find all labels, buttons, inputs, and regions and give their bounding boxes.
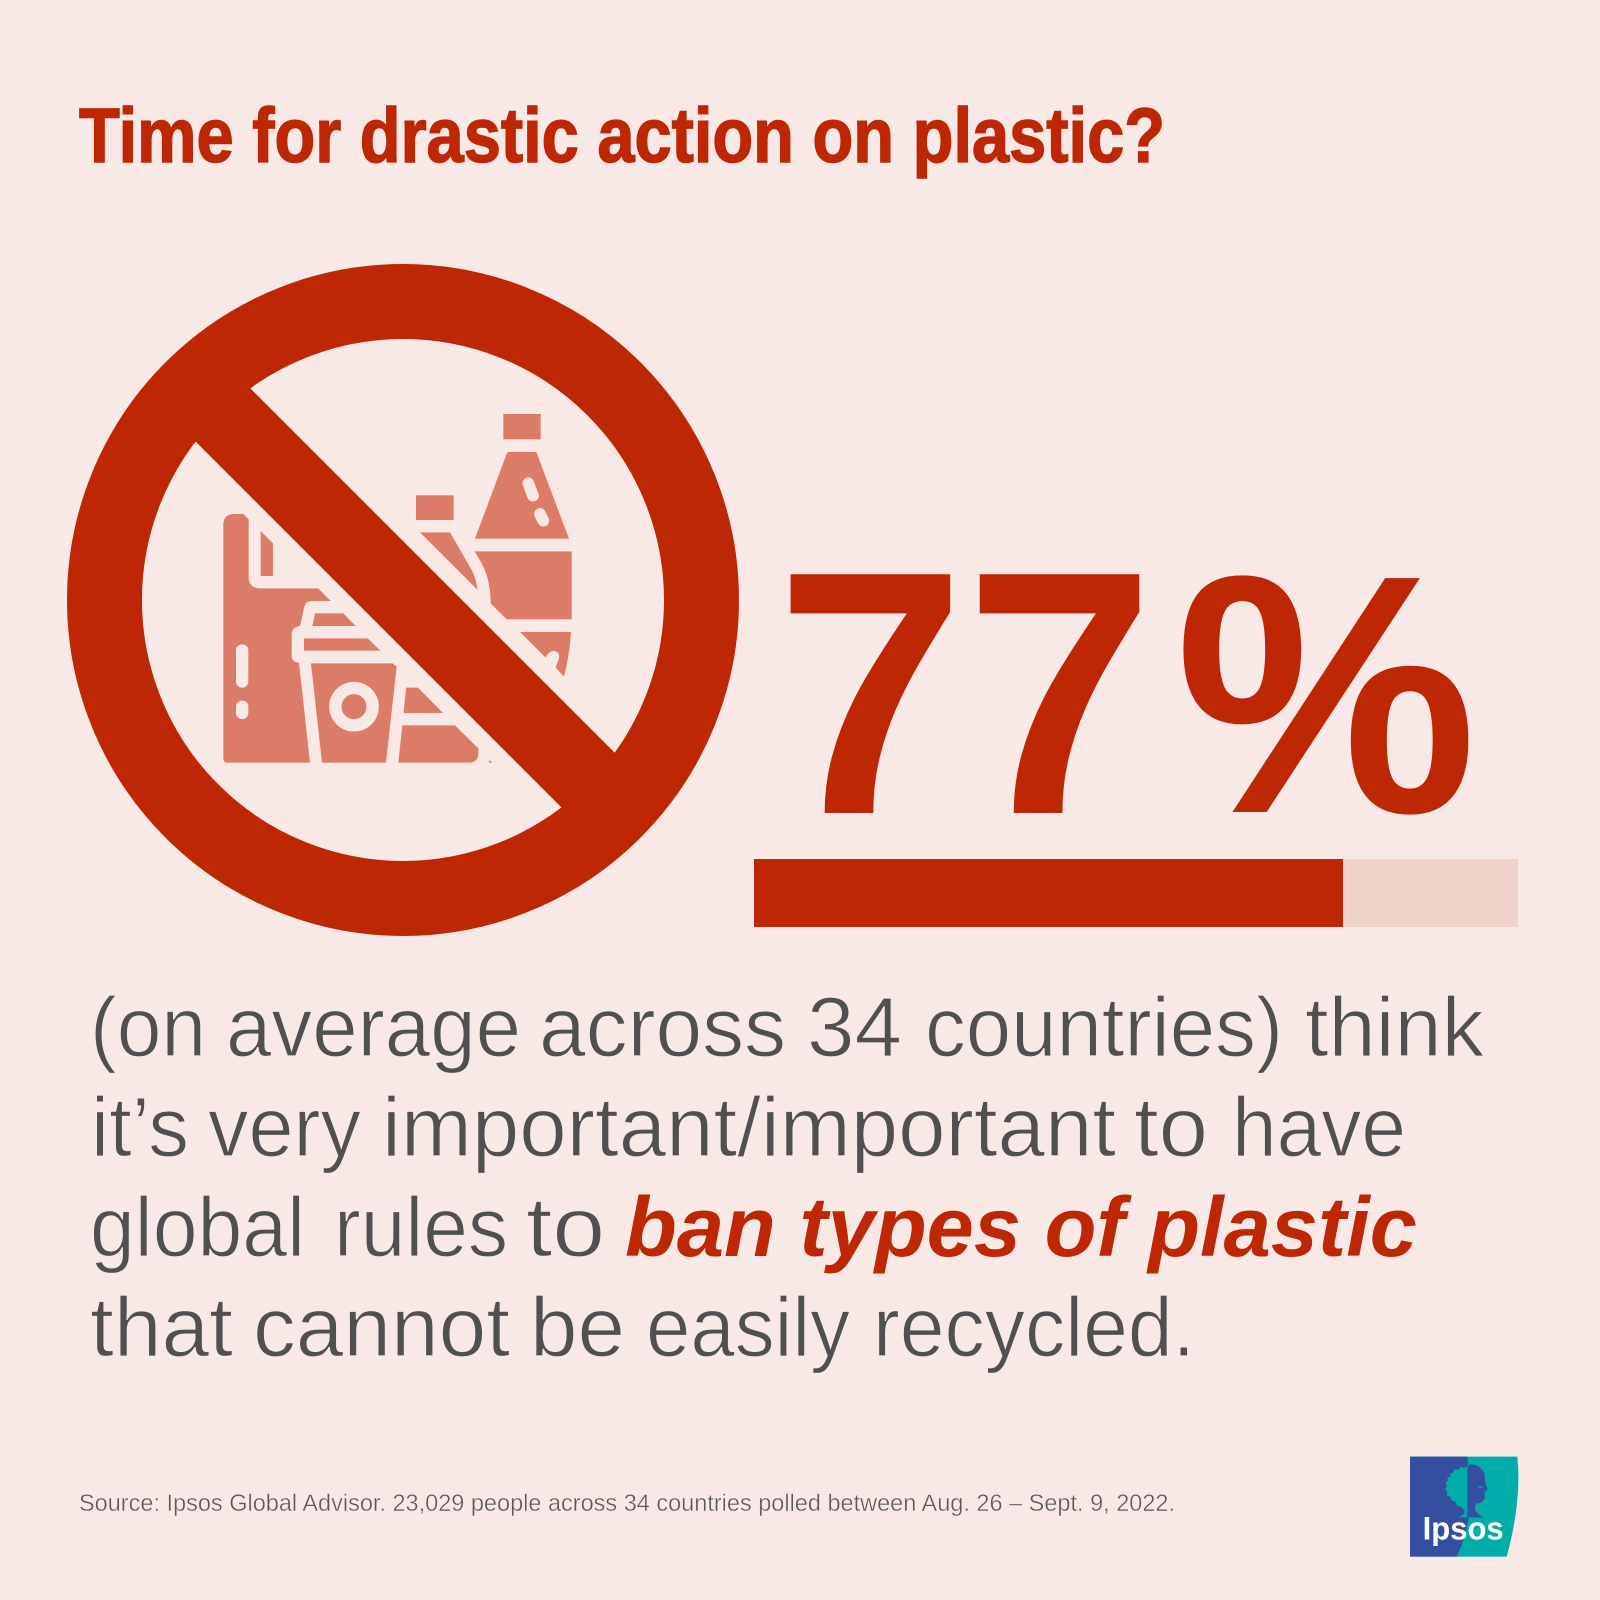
description text: across [539, 980, 786, 1074]
progress bar: 77 percent [754, 859, 1518, 927]
description text: to [526, 1180, 605, 1274]
description text: 34 [807, 980, 902, 1074]
source note: Source: Ipsos Global Advisor. 23,029 people across 34 countries polled between Aug. 26 – Sept. 9, 2022. [79, 1490, 1175, 1517]
big number: 77%: % [1175, 505, 1477, 885]
description text: countries) [925, 980, 1283, 1074]
description text: very [208, 1080, 361, 1174]
prohibition ring [104, 302, 702, 898]
title: Time for drastic action on plastic? [79, 93, 1165, 179]
description text: ban types of plastic [625, 1180, 1417, 1274]
big number: 77% [776, 499, 1477, 887]
bar track [754, 859, 1518, 927]
description text: think [1305, 980, 1485, 1074]
description text: it’s [91, 1080, 189, 1174]
icon: prohibited plastic items [104, 302, 702, 898]
description text: global [90, 1180, 305, 1274]
description text: cannot [253, 1280, 510, 1374]
description text: average [226, 980, 521, 1074]
bar fill [754, 859, 1343, 927]
description text [90, 980, 1485, 1374]
icon: plastic items [223, 414, 572, 763]
big number: 77%: 77 [776, 499, 1154, 887]
description text: rules [334, 1180, 508, 1274]
description text: be [530, 1280, 625, 1374]
description text: that [90, 1280, 233, 1374]
prohibition slash [150, 338, 640, 836]
description text: (on [90, 980, 206, 1074]
description text: easily [646, 1280, 850, 1374]
logo: Ipsos [1410, 1457, 1518, 1557]
description text: to [1134, 1080, 1208, 1174]
description text: important/important [382, 1080, 1116, 1174]
description text: recycled. [873, 1280, 1195, 1374]
logo: Ipsos: Ipsos [1423, 1510, 1504, 1546]
description text: have [1232, 1080, 1406, 1174]
